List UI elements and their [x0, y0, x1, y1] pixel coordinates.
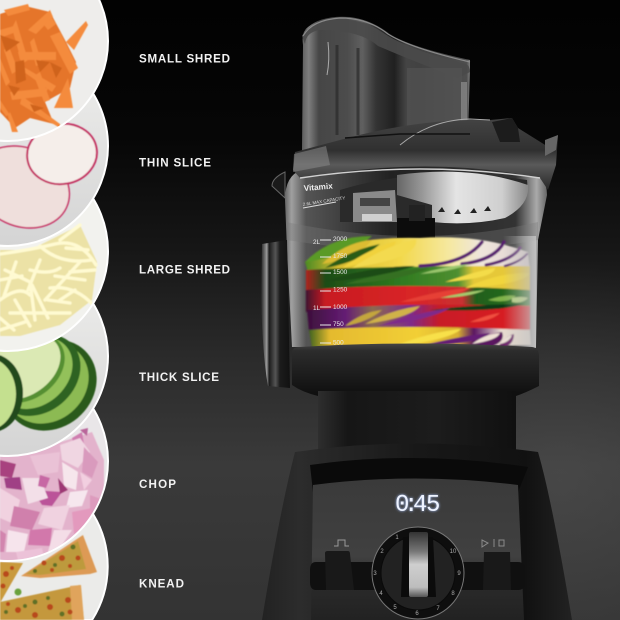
- measurement scale: [313, 236, 348, 346]
- pedestal: [318, 391, 516, 450]
- layer 5 slices: [395, 329, 514, 347]
- measurement scale: 1750: [333, 253, 348, 260]
- measurement scale: 1500: [333, 269, 348, 276]
- heading labels column: [139, 52, 230, 590]
- measurement scale: 2L: [313, 239, 321, 246]
- plate: thin slice (radish): [0, 93, 109, 247]
- plate: large shred (cheese): [0, 198, 109, 352]
- speed dial: 8: [451, 591, 455, 597]
- speed dial: 10: [450, 549, 457, 555]
- speed dial: 1: [395, 535, 399, 541]
- plate: chop (red onion): [0, 408, 109, 562]
- measurement scale: 1L: [313, 305, 321, 312]
- speed dial: 6: [415, 611, 419, 617]
- layered vegetables: [305, 236, 536, 348]
- control panel: [311, 478, 524, 620]
- feed chute: [302, 17, 470, 160]
- speed dial: 3: [373, 571, 377, 577]
- left paddle: [325, 551, 354, 590]
- start stop icon: [482, 539, 504, 547]
- speed dial: [372, 527, 464, 619]
- label: thin slice: THIN SLICE: [139, 156, 211, 170]
- measurement scale: 2000: [333, 236, 348, 243]
- label: small shred: SMALL SHRED: [139, 52, 230, 66]
- layer 4 slices: [345, 306, 500, 326]
- right paddle: [483, 552, 511, 590]
- label: knead: KNEAD: [139, 578, 184, 590]
- speed dial: 9: [457, 571, 461, 577]
- layer 3 slices: [400, 288, 528, 310]
- speed dial: 7: [436, 606, 440, 612]
- panel: plate stack: [0, 0, 115, 620]
- spout handle: [261, 240, 290, 388]
- plate: small shred (carrot): [0, 0, 108, 141]
- plate: knead (pizza): [0, 514, 109, 620]
- measurement scale: 750: [333, 321, 344, 328]
- vegetable colour bands: [305, 237, 531, 348]
- lid: [272, 118, 558, 198]
- capacity mark: 2.6L MAX CAPACITY: [302, 195, 346, 207]
- speed dial: 5: [393, 605, 397, 611]
- label: chop: CHOP: [139, 478, 176, 491]
- layer 1 slices: [305, 236, 527, 268]
- measurement scale: 500: [333, 340, 344, 346]
- glass reflection right: [503, 236, 536, 348]
- measurement scale: 1000: [333, 304, 348, 311]
- jar bowl: [285, 162, 547, 347]
- measurement scale: 1250: [333, 286, 348, 294]
- switch bar: [310, 562, 525, 590]
- brand mark: Vitamix: [303, 181, 333, 193]
- blade disc: [340, 172, 528, 238]
- jar collar: [292, 344, 539, 396]
- speed dial: 2: [380, 549, 384, 555]
- timer display: 0:45: [395, 492, 440, 519]
- blender illustration: [261, 17, 572, 620]
- pulse icon: [334, 540, 349, 546]
- label: large shred: LARGE SHRED: [139, 264, 230, 276]
- layer 2 slices: [322, 264, 530, 288]
- speed dial: 4: [379, 591, 383, 597]
- motor base: [262, 444, 572, 620]
- plate: thick slice (cucumber): [0, 303, 109, 457]
- timer display: 0:45: [395, 492, 440, 519]
- label: thick slice: THICK SLICE: [139, 371, 219, 384]
